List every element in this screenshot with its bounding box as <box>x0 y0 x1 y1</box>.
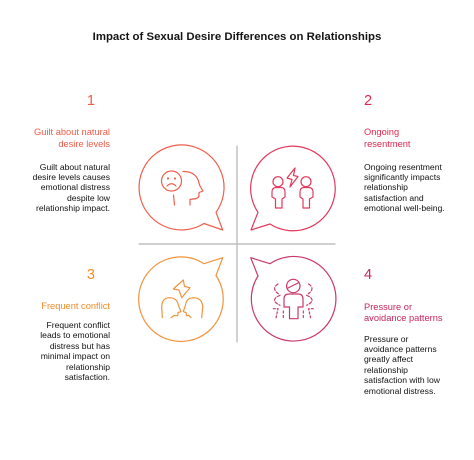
body 3 <box>40 320 110 382</box>
heading 4 <box>364 302 443 323</box>
body 1: Guilt about natural <box>40 162 110 172</box>
panel: item 1 text <box>33 93 110 213</box>
heading 1: desire levels <box>58 139 110 149</box>
body 3: leads to emotional <box>40 330 110 340</box>
body 1 <box>33 162 110 213</box>
body 3: distress but has <box>50 341 110 351</box>
heading 1: Guilt about natural <box>34 127 110 137</box>
body 2: satisfaction and <box>364 193 424 203</box>
body 2: significantly impacts <box>364 172 440 182</box>
heading 3: Frequent conflict <box>41 300 110 310</box>
heading 1 <box>34 127 110 149</box>
heading 4: avoidance patterns <box>364 313 443 323</box>
body 4: relationship <box>364 365 408 375</box>
heading 4: Pressure or <box>364 302 412 312</box>
body 4: Pressure or <box>364 334 408 344</box>
number 4: 4 <box>364 267 372 283</box>
icon: speech bubble with sad face and head <box>139 145 224 230</box>
heading 2: Ongoing <box>364 127 399 137</box>
body 1: relationship impact. <box>36 203 110 213</box>
body 3: relationship <box>66 362 110 372</box>
number 2: 2 <box>364 93 372 109</box>
heading 2: resentment <box>364 139 411 149</box>
number 3: 3 <box>87 267 95 283</box>
body 3: satisfaction. <box>65 372 110 382</box>
panel: item 3 text <box>40 267 110 382</box>
body 3: Frequent conflict <box>46 320 110 330</box>
panel: item 2 text <box>364 93 445 213</box>
title: Impact of Sexual Desire Differences on Relationships <box>93 31 381 43</box>
body 1: despite low <box>67 193 110 203</box>
heading 2 <box>364 127 411 149</box>
body 1: desire levels causes <box>33 172 110 182</box>
body 4: avoidance patterns <box>364 344 437 354</box>
icon: speech bubble with two people and lightning bolt <box>251 146 335 231</box>
body 4 <box>364 334 440 396</box>
icon: speech bubble with two heads and lightning bolt <box>139 257 223 341</box>
body 2: Ongoing resentment <box>364 162 442 172</box>
body 2: relationship <box>364 182 408 192</box>
body 4: greatly affect <box>364 354 413 364</box>
body 4: emotional distress. <box>364 386 436 396</box>
icon: speech bubble with person and surrounding dashed figures <box>251 256 336 341</box>
body 1: emotional distress <box>41 182 110 192</box>
body 4: satisfaction with low <box>364 375 440 385</box>
panel: item 4 text <box>364 267 443 396</box>
body 3: minimal impact on <box>41 351 110 361</box>
number 1: 1 <box>87 93 95 109</box>
body 2 <box>364 162 445 213</box>
body 2: emotional well-being. <box>364 203 445 213</box>
